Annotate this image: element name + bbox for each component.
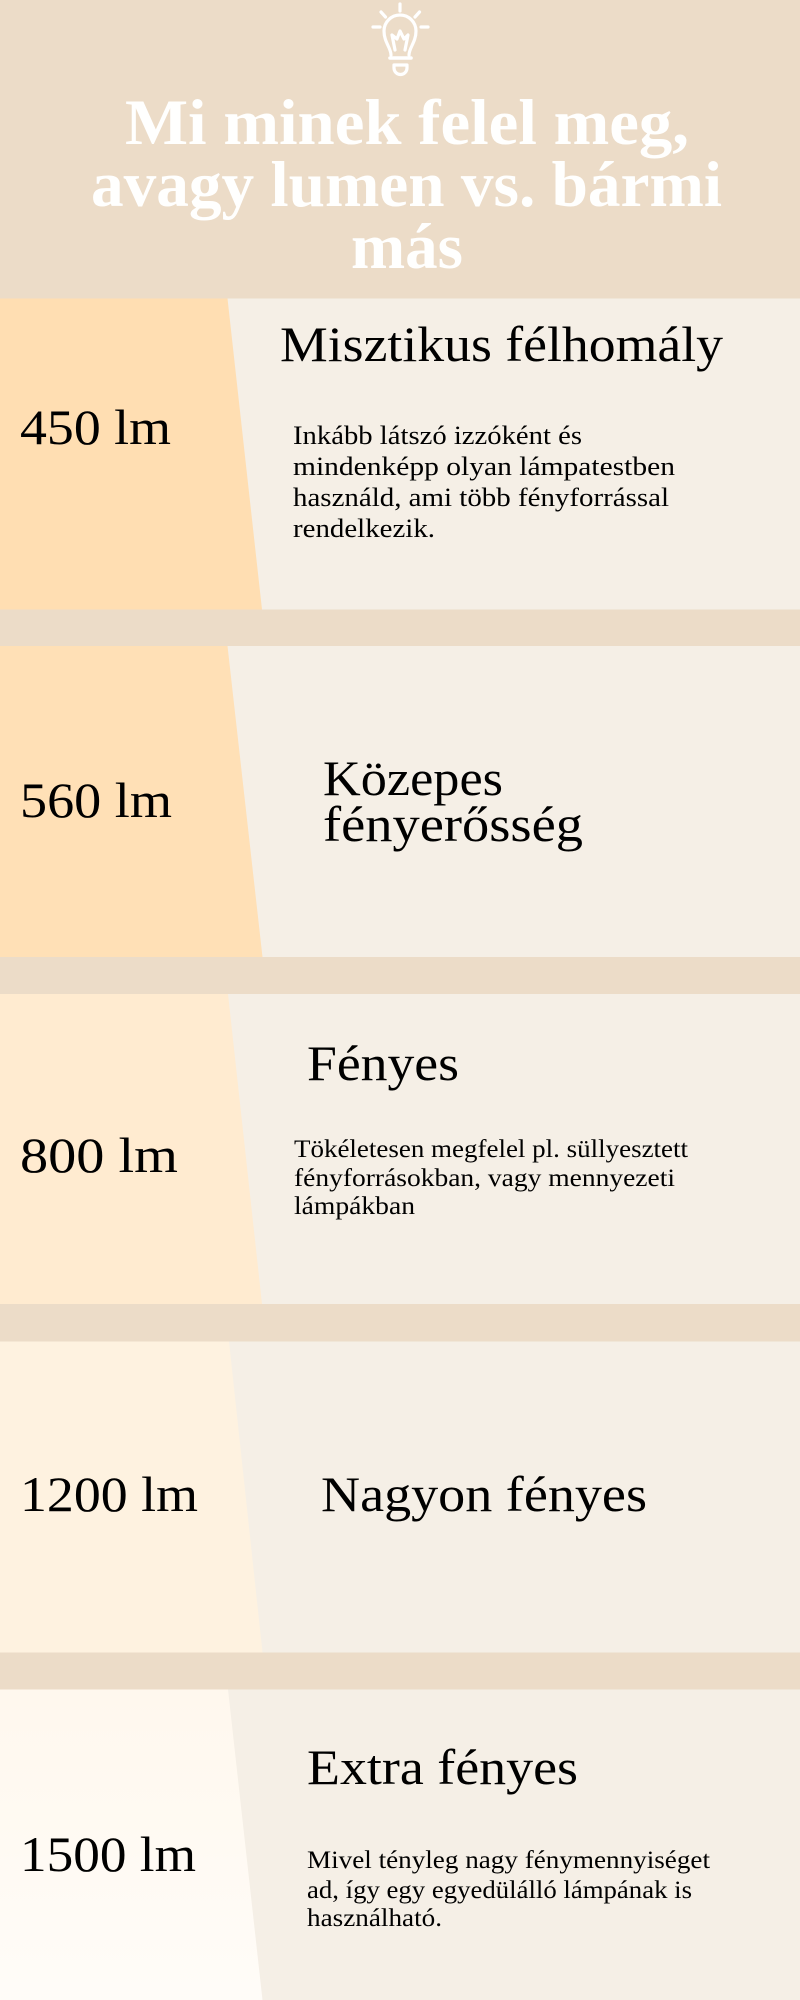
icon: light bulb — [373, 4, 428, 75]
heading: Nagyon fényes — [321, 1466, 647, 1522]
lumen value: 560 lm — [20, 772, 172, 828]
brightness band — [0, 994, 262, 1304]
brightness band — [0, 646, 262, 957]
heading: Misztikus félhomály — [280, 316, 723, 372]
description: ad, így egy egyedülálló lámpának is — [307, 1877, 692, 1904]
title — [91, 87, 722, 283]
description: Mivel tényleg nagy fénymennyiséget — [307, 1847, 710, 1874]
brightness band — [0, 1342, 262, 1652]
row: 1200 lm — [0, 1342, 800, 1652]
description: lámpákban — [294, 1193, 416, 1220]
description: Inkább látszó izzóként és — [293, 421, 582, 450]
heading: Extra fényes — [307, 1739, 578, 1795]
heading — [323, 750, 583, 852]
row: 1500 lm — [0, 1690, 800, 2000]
description: fényforrásokban, vagy mennyezeti — [294, 1165, 675, 1192]
lumen value: 800 lm — [20, 1127, 178, 1183]
title: Mi minek felel meg, — [125, 87, 689, 159]
description: mindenképp olyan lámpatestben — [293, 452, 675, 481]
row: 450 lm — [0, 298, 800, 610]
description: használható. — [307, 1905, 442, 1932]
description: Tökéletesen megfelel pl. süllyesztett — [294, 1136, 688, 1163]
description — [307, 1847, 710, 1932]
heading: Közepes — [323, 750, 503, 806]
lumen value: 1500 lm — [20, 1826, 196, 1882]
heading: Fényes — [307, 1035, 459, 1091]
lumen value: 1200 lm — [20, 1466, 198, 1522]
row: 560 lm — [0, 646, 800, 957]
description — [294, 1136, 688, 1220]
row: 800 lm — [0, 994, 800, 1304]
lumen value: 450 lm — [20, 399, 171, 455]
heading: fényerősség — [323, 796, 583, 852]
brightness band — [0, 1690, 262, 2000]
description: használd, ami több fényforrással — [293, 483, 669, 512]
description — [293, 421, 675, 543]
title: avagy lumen vs. bármi — [91, 149, 722, 221]
header — [91, 4, 722, 283]
brightness band — [0, 298, 262, 610]
title: más — [351, 211, 463, 283]
description: rendelkezik. — [293, 514, 435, 543]
